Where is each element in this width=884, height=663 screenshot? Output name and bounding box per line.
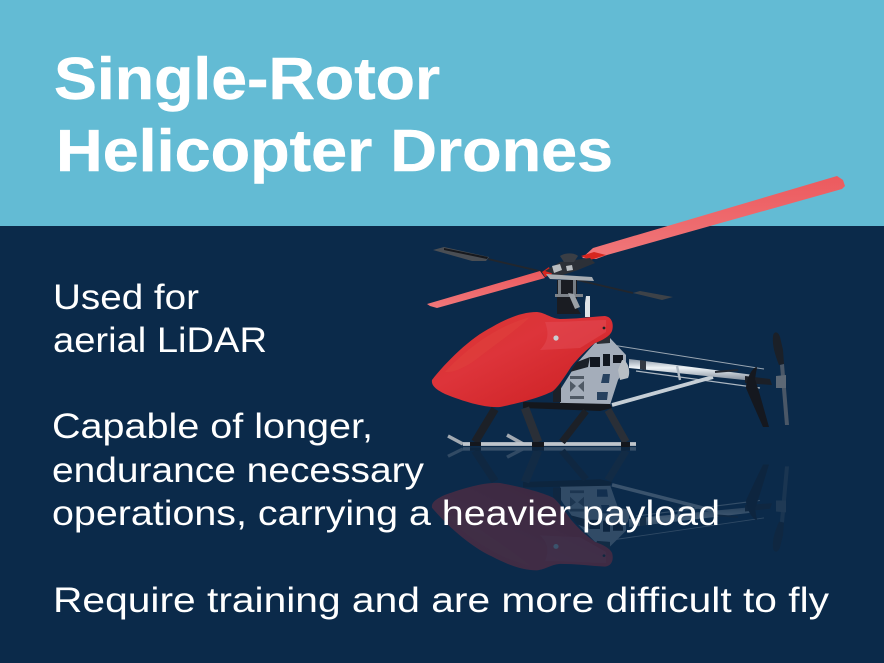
body text: capability: endurance necessary	[52, 451, 425, 490]
body text: use: Used for	[53, 278, 199, 317]
helicopter drone	[427, 176, 845, 447]
body text: limitation: Require training and are more difficult to fly	[53, 581, 830, 620]
body text: capability: operations, carrying a heavier payload	[52, 494, 720, 533]
header band	[0, 0, 884, 226]
fuselage, boom, skids and tail	[432, 312, 789, 447]
title: Helicopter Drones	[56, 118, 613, 184]
title	[54, 46, 613, 184]
body text: capability: Capable of longer,	[52, 407, 373, 446]
body text: capability	[52, 407, 720, 533]
helicopter reflection	[432, 446, 789, 570]
body text: use: aerial LiDAR	[53, 321, 267, 360]
main rotor	[427, 176, 845, 317]
title: Single-Rotor	[54, 46, 440, 112]
body text: use	[53, 278, 267, 360]
